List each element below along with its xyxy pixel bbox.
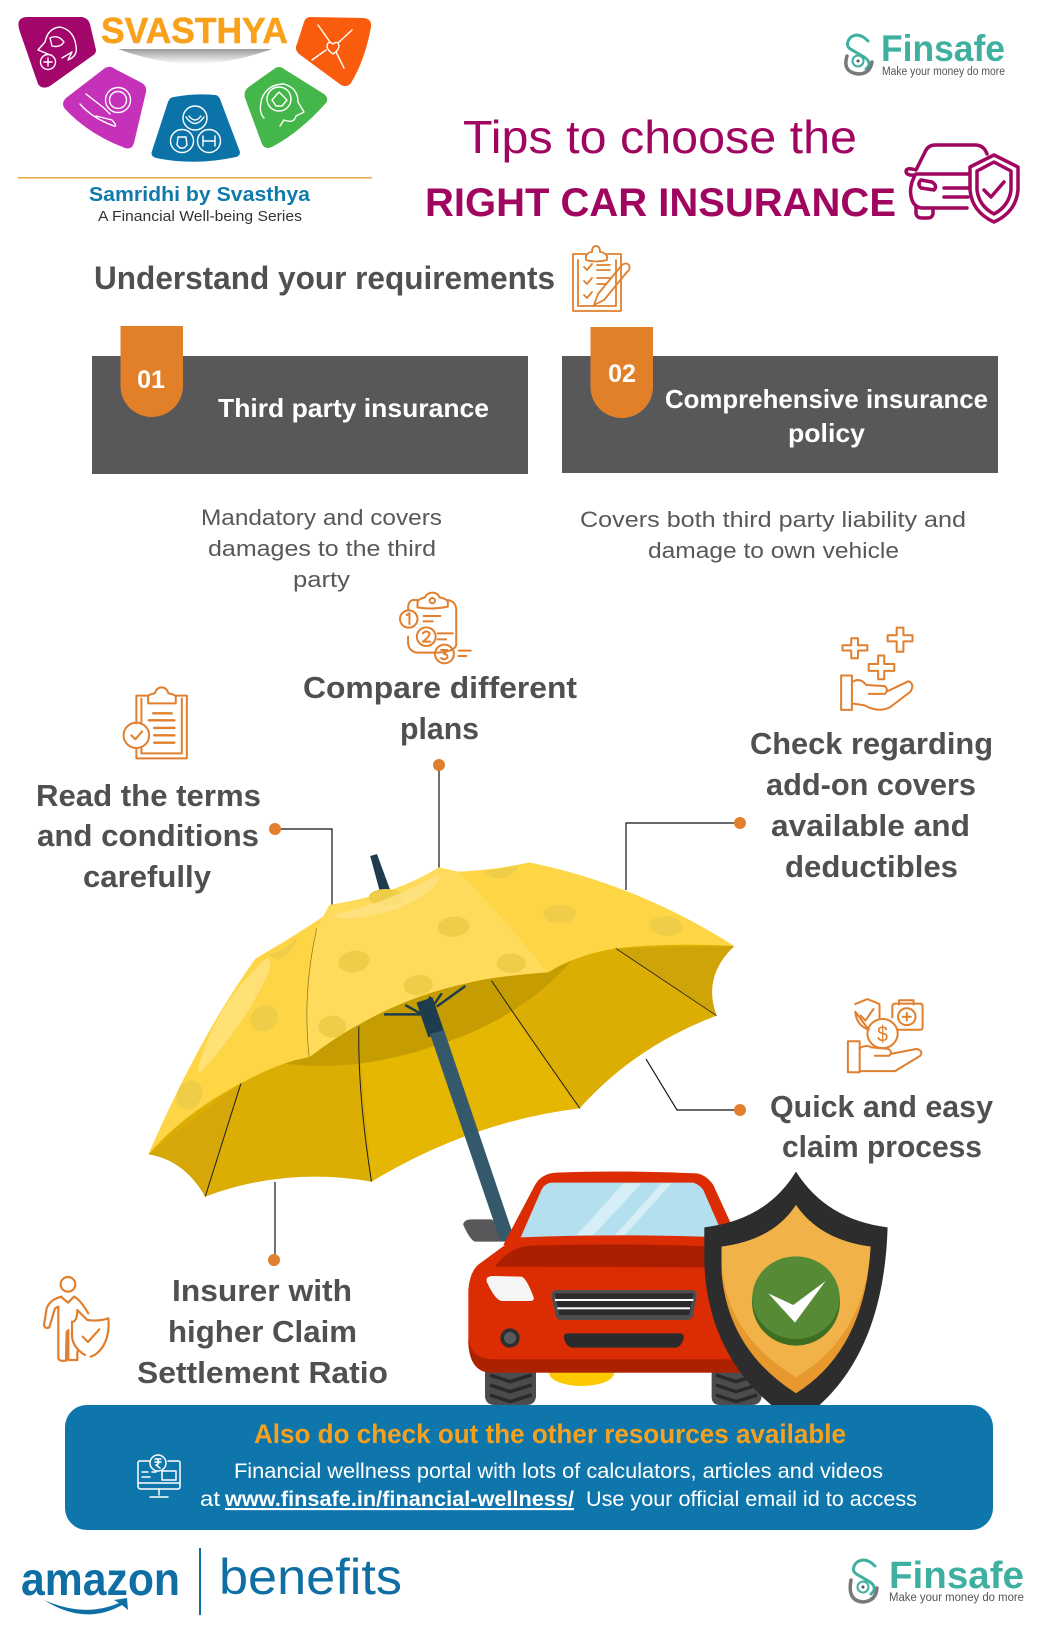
car headlight bbox=[487, 1276, 534, 1301]
umbrella hub bbox=[417, 997, 444, 1037]
callout text: available and bbox=[771, 808, 970, 843]
callout dot bbox=[269, 823, 281, 835]
illustration: car and shield bbox=[430, 1030, 888, 1423]
banner background bbox=[65, 1405, 993, 1530]
icon: person with shield bbox=[44, 1277, 109, 1361]
umbrella shaft bbox=[430, 1030, 513, 1242]
title: RIGHT CAR INSURANCE bbox=[425, 181, 896, 225]
umbrella light panel bbox=[308, 867, 546, 1057]
umbrella highlights bbox=[198, 875, 439, 1072]
car tires bbox=[485, 1370, 762, 1405]
banner line two: www.finsafe.in/financial-wellness/ bbox=[224, 1487, 574, 1511]
banner line two: at bbox=[200, 1487, 220, 1511]
callout dot bbox=[734, 817, 746, 829]
icon: hand with plus signs bbox=[841, 628, 913, 710]
icon: monitor with rupee bbox=[138, 1455, 180, 1497]
icon: shield, medical case and coin in hand: $ bbox=[877, 1022, 888, 1047]
card title bbox=[665, 384, 988, 448]
text: third party description bbox=[201, 505, 442, 592]
callout text bbox=[137, 1273, 388, 1390]
text: comprehensive description bbox=[580, 507, 966, 563]
callout text: Insurer with bbox=[172, 1273, 352, 1308]
number tab 02 bbox=[590, 327, 653, 418]
car fog lamp bbox=[500, 1328, 520, 1348]
text: third party description: damages to the third bbox=[208, 536, 436, 561]
title: Tips to choose the bbox=[463, 111, 857, 163]
callout: insurer claim settlement ratio bbox=[137, 1182, 388, 1390]
callout dot bbox=[433, 759, 445, 771]
car hood bbox=[495, 1244, 713, 1267]
logo subtitle: Samridhi by Svasthya bbox=[89, 183, 311, 206]
windshield bbox=[521, 1183, 724, 1237]
car body bbox=[468, 1236, 750, 1373]
callout text: Compare different bbox=[303, 670, 577, 705]
amazon wordmark: amazon bbox=[21, 1553, 180, 1605]
umbrella canopy bbox=[148, 862, 734, 1154]
panel: comprehensive insurance bbox=[562, 327, 998, 473]
icon: shield, medical case and coin in hand bbox=[848, 999, 923, 1072]
callout text: add-on covers bbox=[766, 767, 976, 802]
windshield glare bbox=[577, 1183, 672, 1235]
panel: third party insurance bbox=[92, 326, 528, 474]
banner line one: Financial wellness portal with lots of calculators, articles and videos bbox=[234, 1459, 883, 1483]
callout text: claim process bbox=[782, 1129, 982, 1164]
title bbox=[425, 111, 896, 225]
callout text: and conditions bbox=[37, 818, 259, 853]
Finsafe wordmark: Finsafe bbox=[881, 28, 1005, 69]
number tab 01 bbox=[120, 326, 183, 417]
callout text: higher Claim bbox=[168, 1314, 357, 1349]
logo divider bbox=[199, 1548, 201, 1615]
logo: amazon benefits bbox=[21, 1548, 402, 1615]
logo tile: physical bbox=[152, 94, 240, 162]
callout connector bbox=[274, 1182, 276, 1263]
text: third party description: Mandatory and covers bbox=[201, 505, 442, 530]
car bumper bbox=[468, 1338, 745, 1373]
callout: read the terms bbox=[36, 778, 332, 905]
logo tile: social bbox=[296, 17, 371, 86]
callout text: Read the terms bbox=[36, 778, 261, 813]
Finsafe wordmark: Finsafe bbox=[889, 1555, 1024, 1597]
logo tile: health bbox=[18, 17, 96, 88]
icon: numbered list clipboard bbox=[400, 593, 471, 663]
logo: Svasthya series bbox=[18, 10, 372, 225]
car grille bbox=[552, 1290, 697, 1320]
umbrella tip bbox=[370, 854, 390, 893]
Finsafe tagline: Make your money do more bbox=[889, 1592, 1024, 1604]
text: comprehensive description: damage to own vehicle bbox=[648, 538, 899, 563]
callout text bbox=[750, 726, 993, 884]
callout connector bbox=[438, 765, 440, 868]
callout text: Quick and easy bbox=[770, 1089, 994, 1124]
card background bbox=[92, 356, 528, 474]
icon: document with tick bbox=[124, 687, 187, 758]
callout dot bbox=[268, 1254, 280, 1266]
logo: Finsafe top bbox=[846, 28, 1005, 78]
number 02: 02 bbox=[608, 360, 636, 388]
umbrella seam bbox=[307, 928, 317, 1057]
callout text bbox=[303, 670, 577, 746]
callout connector bbox=[626, 823, 740, 890]
umbrella underside bbox=[148, 920, 734, 1197]
banner line two bbox=[200, 1487, 917, 1511]
text: comprehensive description: Covers both third party liability and bbox=[580, 507, 966, 532]
logo tile: wealth bbox=[63, 67, 146, 148]
icon: checklist clipboard bbox=[573, 246, 630, 311]
panel: other resources bbox=[65, 1405, 993, 1530]
callout connector bbox=[275, 829, 332, 905]
logo tagline: A Financial Well-being Series bbox=[98, 209, 302, 225]
car underside accent bbox=[549, 1361, 614, 1386]
amazon smile bbox=[44, 1598, 128, 1614]
callout text: plans bbox=[400, 711, 479, 746]
umbrella ribs bbox=[205, 948, 717, 1197]
card title: Comprehensive insurance bbox=[665, 384, 988, 414]
banner line two: Use your official email id to access bbox=[586, 1487, 917, 1511]
logo shadow bbox=[118, 49, 272, 64]
card title: policy bbox=[788, 418, 866, 448]
callout connector bbox=[646, 1059, 740, 1110]
icon: car with shield bbox=[906, 145, 1018, 222]
logo divider bbox=[18, 177, 372, 179]
callout: add-on covers bbox=[626, 726, 993, 890]
card title: Third party insurance bbox=[218, 393, 489, 423]
benefits wordmark: benefits bbox=[219, 1549, 402, 1605]
umbrella bbox=[148, 854, 734, 1197]
banner heading: Also do check out the other resources available bbox=[254, 1419, 846, 1449]
logo wordmark: SVASTHYA bbox=[101, 10, 288, 51]
callout: quick claim process bbox=[646, 1059, 994, 1164]
callout text: Settlement Ratio bbox=[137, 1355, 388, 1390]
callout text bbox=[36, 778, 261, 894]
Finsafe emblem bbox=[850, 1560, 877, 1602]
logo: Finsafe bottom bbox=[850, 1555, 1024, 1604]
text: third party description: party bbox=[293, 567, 351, 592]
callout text: deductibles bbox=[785, 849, 958, 884]
shield bbox=[704, 1172, 888, 1423]
Finsafe tagline: Make your money do more bbox=[882, 66, 1005, 78]
heading: understand your requirements: Understand your requirements bbox=[94, 260, 555, 296]
card background bbox=[562, 356, 998, 473]
callout text: carefully bbox=[83, 859, 212, 894]
callout text bbox=[770, 1089, 994, 1164]
Finsafe emblem bbox=[846, 35, 872, 74]
logo tile: mental bbox=[245, 67, 327, 148]
callout text: Check regarding bbox=[750, 726, 993, 761]
car lower vent bbox=[564, 1333, 684, 1348]
number 01: 01 bbox=[137, 366, 165, 394]
umbrella spokes bbox=[384, 986, 465, 1014]
callout: compare different plans bbox=[303, 670, 577, 868]
umbrella spots bbox=[172, 865, 684, 1112]
car roof bbox=[503, 1171, 740, 1245]
car mirror bbox=[463, 1219, 506, 1242]
callout dot bbox=[734, 1104, 746, 1116]
